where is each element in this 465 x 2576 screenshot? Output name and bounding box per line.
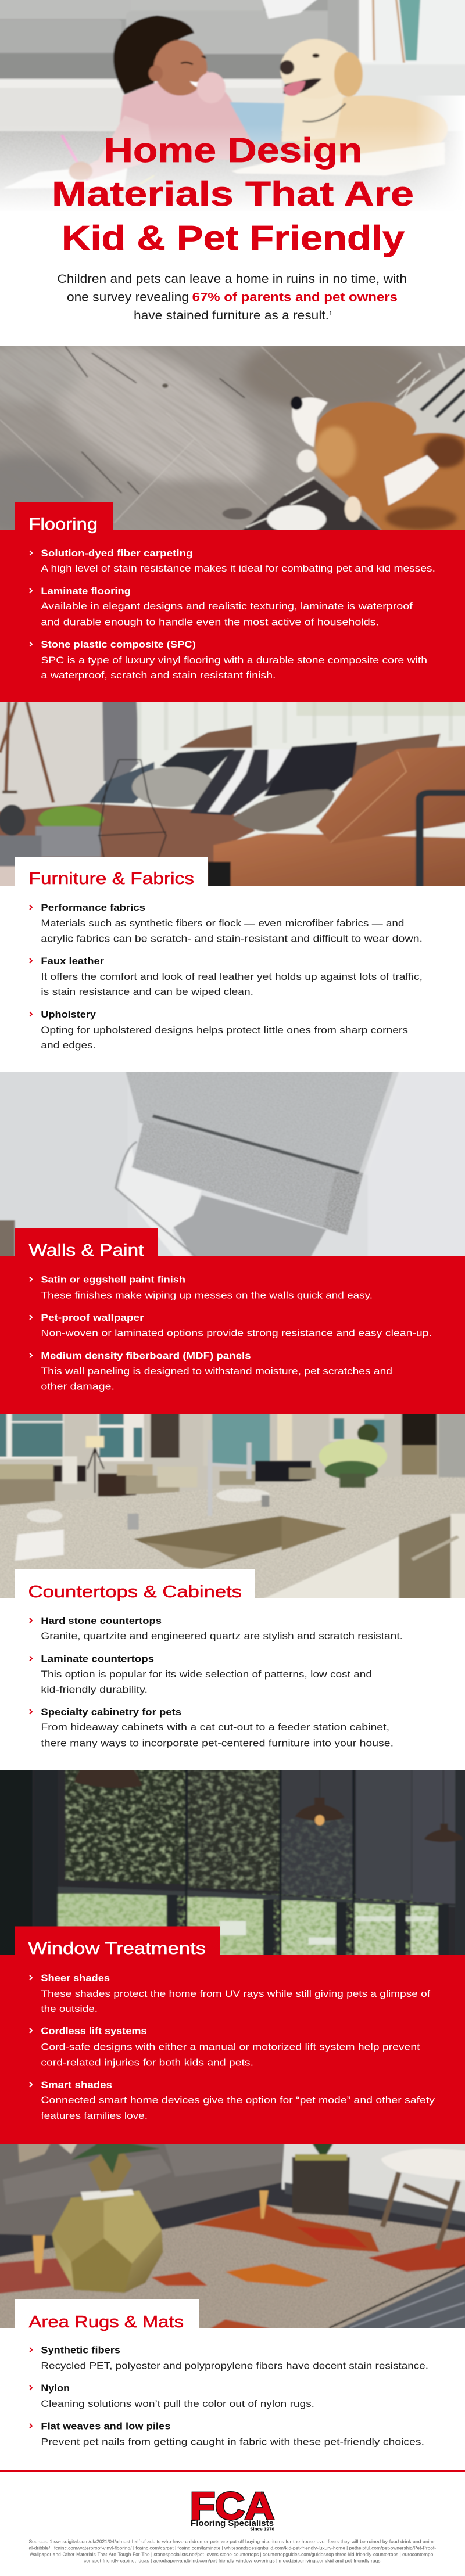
item: cordless lift systems: cord-related injuries for both kids and pets. [41, 2057, 253, 2068]
list: flooring items [30, 548, 435, 681]
panel: area rugs and mats [0, 2138, 465, 2448]
item: performance fabrics [30, 902, 423, 944]
item: laminate countertops [30, 1653, 372, 1695]
shades [65, 1766, 185, 1884]
item: laminate flooring [30, 585, 413, 627]
item: nylon: Nylon [41, 2383, 70, 2394]
item: faux leather [30, 955, 423, 997]
item: specialty cabinetry [30, 1706, 394, 1749]
sources: al-dribble/ | fcainc.com/waterproof-vinyl-flooring/ | fcainc.com/carpet | fcainc.com/laminate | whitesandsdesignbuild.com/kid-pet-friendly-luxury-home | pethelpful.com/pet-ownership/Pet-Proof- [29, 2545, 436, 2551]
title: Home Design [104, 131, 363, 170]
item: synthetic fibers: Recycled PET, polyester and polypropylene fibers have decent stain resistance. [41, 2361, 428, 2372]
item: performance fabrics: acrylic fabrics can be scratch- and stain-resistant and difficult to wear down. [41, 933, 423, 944]
list: countertops items [30, 1615, 403, 1749]
heading tab: Countertops & Cabinets [15, 1569, 255, 1601]
item: laminate flooring: Available in elegant designs and realistic texturing, laminate is waterproof [41, 601, 413, 612]
sofa [0, 2138, 285, 2236]
dog [288, 96, 448, 162]
item: MDF panels: This wall paneling is designed to withstand moisture, pet scratches and [41, 1366, 392, 1377]
item: laminate countertops: kid-friendly durability. [41, 1684, 148, 1695]
item: sheer shades: Sheer shades [41, 1973, 110, 1984]
item: synthetic fibers [30, 2345, 428, 2372]
item: nylon [30, 2383, 314, 2409]
item: upholstery: Opting for upholstered designs helps protect little ones from sharp corners [41, 1025, 408, 1036]
item: laminate flooring: and durable enough to handle even the most active of households. [41, 617, 379, 627]
item: sheer shades: the outside. [41, 2003, 98, 2014]
intro paragraph: 1 [329, 311, 332, 317]
section body: red panel [0, 530, 465, 702]
list: window items [30, 1973, 435, 2121]
item: smart shades: features families love. [41, 2110, 148, 2121]
footer logo: FCA Flooring Specialists: Since 1976 [250, 2527, 274, 2531]
vase and plant [88, 2154, 132, 2192]
item: cordless lift systems: Cord-safe designs with either a manual or motorized lift system help prevent [41, 2042, 420, 2053]
item: satin or eggshell [30, 1274, 373, 1300]
item: sheer shades: These shades protect the home from UV rays while still giving pets a glimpse of [41, 1988, 430, 1999]
sink [134, 1516, 347, 1569]
item: upholstery: Upholstery [41, 1009, 96, 1020]
item: performance fabrics: Performance fabrics [41, 902, 145, 913]
item: stone plastic composite: SPC is a type of luxury vinyl flooring with a durable stone composite core with [41, 655, 427, 666]
heading tab: Flooring [15, 502, 113, 534]
item: pet-proof wallpaper: Non-woven or laminated options provide strong resistance and easy clean-up. [41, 1328, 432, 1339]
heading tab: Walls & Paint [15, 1228, 158, 1260]
item: smart shades [30, 2079, 435, 2121]
list: furniture items [30, 902, 423, 1051]
heading tab: Furniture & Fabrics [15, 857, 208, 888]
item: satin or eggshell: Satin or eggshell paint finish [41, 1274, 185, 1285]
heading tab: Area Rugs & Mats [15, 2299, 199, 2331]
footer logo: FCA Flooring Specialists: ® [260, 2491, 264, 2496]
panel: furniture and fabrics [0, 697, 465, 1051]
pendant lamps [74, 1766, 142, 1788]
item: performance fabrics: Materials such as synthetic fibers or flock — even microfiber fabrics — and [41, 918, 404, 929]
stool [382, 2172, 458, 2250]
heading tab: Countertops & Cabinets: Countertops & Cabinets [28, 1583, 242, 1601]
item: smart shades: Connected smart home devices give the option for “pet mode” and other safety [41, 2094, 435, 2106]
list: rug items [30, 2345, 428, 2448]
item: stone plastic composite [30, 639, 427, 681]
heading tab: Window Treatments: Window Treatments [28, 1939, 206, 1958]
item: laminate countertops: Laminate countertops [41, 1653, 154, 1665]
item: pet-proof wallpaper: Pet-proof wallpaper [41, 1312, 144, 1323]
heading tab: Furniture & Fabrics: Furniture & Fabrics [29, 870, 194, 888]
decor [38, 806, 104, 832]
item: specialty cabinetry: From hideaway cabinets with a cat cut-out to a feeder station cabinet, [41, 1722, 389, 1733]
panel: flooring [0, 105, 465, 828]
item: satin or eggshell: These finishes make wiping up messes on the walls quick and easy. [41, 1289, 373, 1300]
footer logo: FCA Flooring Specialists: FCA [190, 2484, 274, 2527]
sources [29, 2539, 436, 2564]
bin and plant [292, 2157, 350, 2216]
photo: paint roller on white wall [0, 1072, 465, 1256]
item: smart shades: Smart shades [41, 2079, 112, 2090]
fade to white [0, 124, 465, 213]
sources: com/pet-friendly-cabinet-ideas | aerodraperyandblind.com/pet-friendly-window-coverings | mood.jaipurliving.com/kid-and-pet-friendly-rugs [84, 2558, 380, 2564]
girl [119, 71, 255, 160]
flowers [357, 1424, 378, 1442]
item: upholstery: and edges. [41, 1040, 96, 1051]
dog [314, 402, 465, 534]
item: laminate flooring: Laminate flooring [41, 585, 131, 597]
list: walls items [30, 1274, 432, 1392]
hero section [0, 0, 465, 350]
item: pet-proof wallpaper [30, 1312, 432, 1339]
photo: leather sofa with pillows [0, 702, 465, 886]
faucet [210, 1440, 249, 1516]
item: faux leather: Faux leather [41, 955, 104, 967]
item: upholstery [30, 1009, 408, 1051]
item: cordless lift systems: Cordless lift systems [41, 2025, 147, 2036]
cabinet [255, 1536, 399, 1603]
item: synthetic fibers: Synthetic fibers [41, 2345, 120, 2356]
countertop [0, 1477, 465, 1603]
section body: red panel [0, 1256, 465, 1414]
hero photo: girl and golden retriever on a rug [0, 0, 465, 202]
item: nylon: Cleaning solutions won’t pull the color out of nylon rugs. [41, 2398, 314, 2409]
item: solution-dyed carpeting: A high level of stain resistance makes it ideal for combating pet and kid messes. [41, 563, 435, 574]
item: solution-dyed carpeting [30, 548, 435, 574]
intro paragraph [57, 272, 407, 322]
intro paragraph: one survey revealing [67, 290, 189, 304]
item: sheer shades [30, 1973, 430, 2014]
paper and pencil [3, 163, 128, 188]
intro paragraph: Children and pets can leave a home in ruins in no time, with [57, 272, 407, 286]
heading tab: Flooring: Flooring [29, 515, 98, 534]
title [52, 131, 414, 257]
item: stone plastic composite: a waterproof, scratch and stain resistant finish. [41, 670, 276, 681]
photo: granite kitchen island with sink [0, 1414, 465, 1598]
sources: Sources: 1 swnsdigital.com/uk/2021/04/almost-half-of-adults-who-have-children-or-pets-are-put-off-buying-nice-items-for-the-house-over-fears-they-will-be-ruined-by-food-drink-and-anim- [29, 2539, 435, 2545]
item: MDF panels: Medium density fiberboard (MDF) panels [41, 1350, 251, 1361]
item: specialty cabinetry: Specialty cabinetry for pets [41, 1706, 181, 1718]
item: MDF panels: other damage. [41, 1381, 115, 1392]
title: Materials That Are [52, 175, 414, 213]
rug [0, 2205, 465, 2334]
photo: roller shades and pendant lamps [0, 1770, 465, 1955]
intro paragraph: 67% of parents and pet owners [192, 290, 398, 304]
item: stone plastic composite: Stone plastic composite (SPC) [41, 639, 196, 650]
heading tab: Walls & Paint: Walls & Paint [29, 1241, 144, 1260]
item: flat weaves and low piles: Prevent pet nails from getting caught in fabric with these pet-friendly choices. [41, 2437, 424, 2448]
footer logo: FCA Flooring Specialists: Flooring Specialists [191, 2518, 274, 2528]
title: Kid & Pet Friendly [62, 219, 405, 257]
section body: red panel [0, 1955, 465, 2144]
intro paragraph: have stained furniture as a result. [134, 308, 329, 322]
panel: countertops and cabinets [0, 1410, 465, 1749]
item: faux leather: is stain resistance and can be wiped clean. [41, 986, 253, 997]
rug [395, 358, 465, 438]
sources: Wallpaper-and-Other-Materials-That-Are-Tough-For-The | stonespecialists.net/pet-lovers-stone-countertops | countertopguides.com/guides/top-three-kid-friendly-countertops | eurocontempo. [30, 2552, 435, 2557]
item: cordless lift systems [30, 2025, 420, 2068]
panel: window treatments [0, 1766, 465, 2144]
panel: walls and paint [0, 1067, 465, 1414]
item: laminate countertops: This option is popular for its wide selection of patterns, low cost and [41, 1669, 372, 1680]
item: hard stone countertops: Granite, quartzite and engineered quartz are stylish and scratch resistant. [41, 1630, 403, 1641]
heading tab: Window Treatments [15, 1926, 220, 1958]
photo: dog lying on wood plank floor [0, 346, 465, 530]
sofa [0, 803, 255, 890]
item: specialty cabinetry: there many ways to incorporate pet-centered furniture into your house. [41, 1738, 394, 1749]
item: flat weaves and low piles: Flat weaves and low piles [41, 2421, 170, 2432]
item: flat weaves and low piles [30, 2421, 424, 2448]
living room seating [0, 1464, 53, 1481]
gold table [52, 2191, 163, 2293]
heading tab: Area Rugs & Mats: Area Rugs & Mats [29, 2313, 184, 2331]
item: MDF panels [30, 1350, 392, 1392]
photo: patterned area rug with gold side table [0, 2144, 465, 2328]
footer logo: FCA Flooring Specialists: FCA [190, 2484, 274, 2527]
item: faux leather: It offers the comfort and look of real leather yet holds up against lots of traffic, [41, 971, 423, 982]
item: hard stone countertops [30, 1615, 403, 1641]
outside greenery [58, 1894, 172, 1960]
item: solution-dyed carpeting: Solution-dyed fiber carpeting [41, 548, 193, 559]
item: hard stone countertops: Hard stone countertops [41, 1615, 162, 1626]
